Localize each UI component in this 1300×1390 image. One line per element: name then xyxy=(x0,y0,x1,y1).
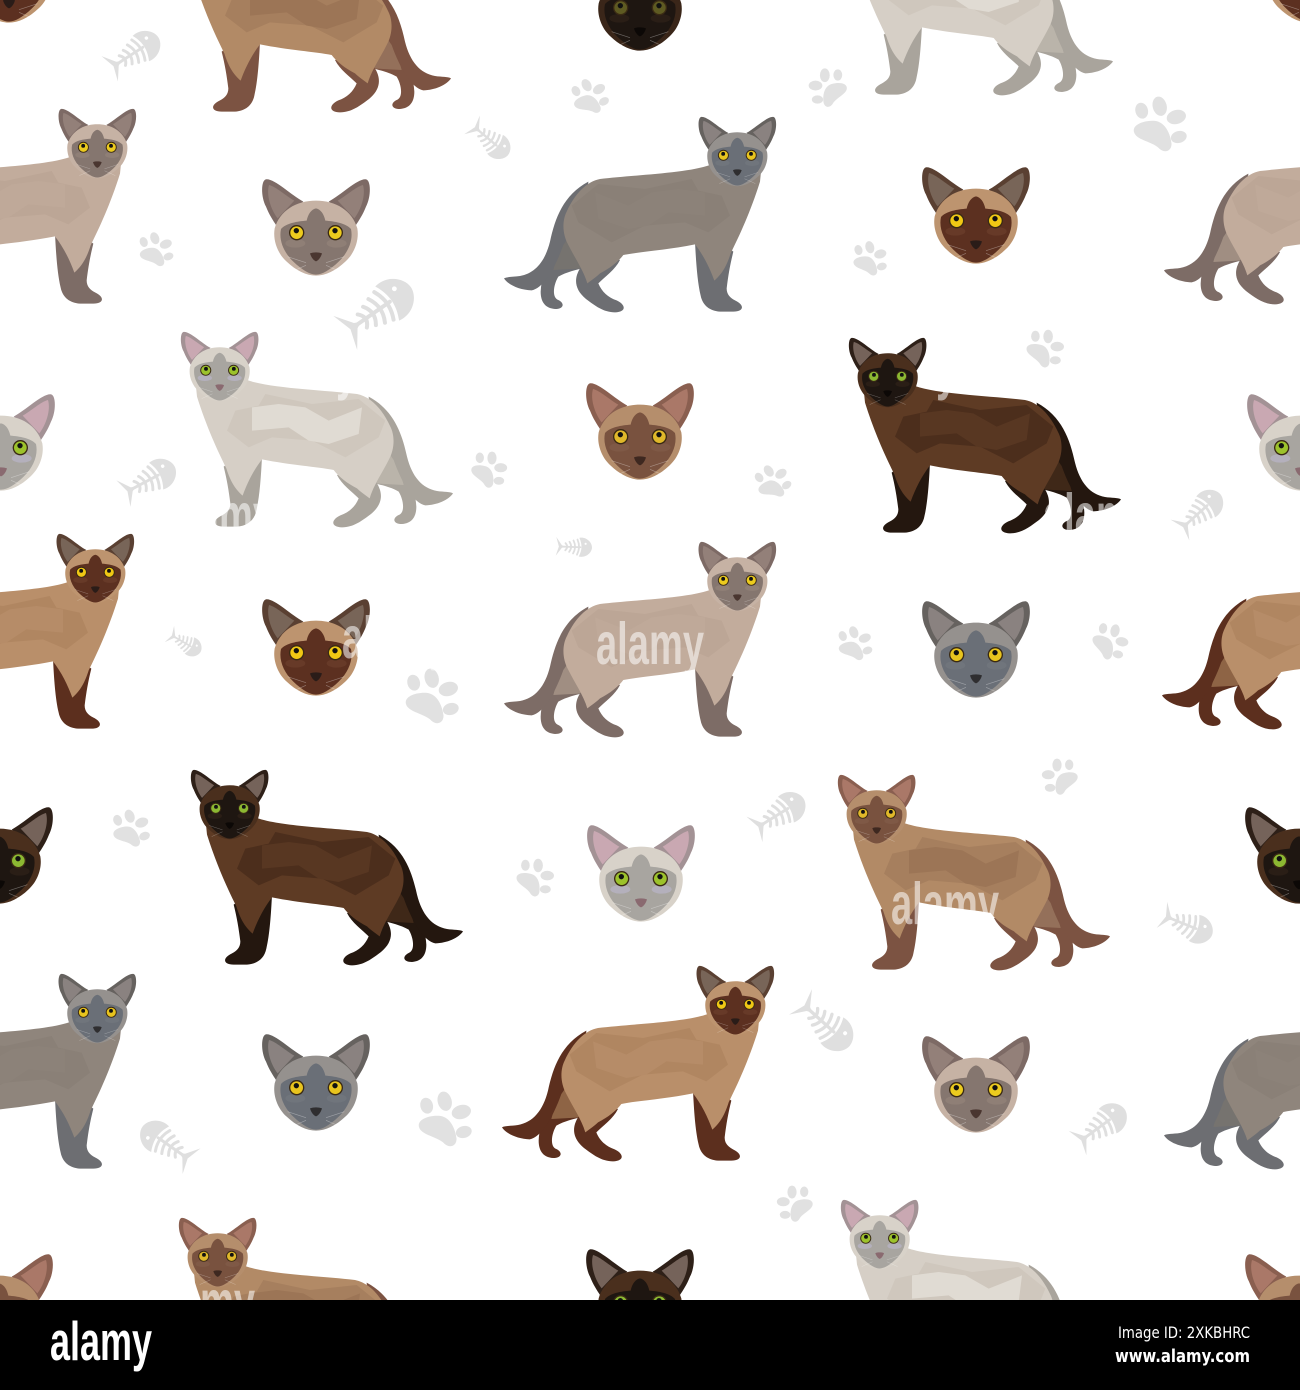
cat: taupe left edge xyxy=(0,109,136,304)
icon: cat head top right xyxy=(1255,0,1300,23)
watermark dark cat feet: alamy xyxy=(1043,482,1151,548)
icon: cat head light right xyxy=(1247,394,1300,491)
watermark light cat: alamy xyxy=(166,482,274,548)
cat: taupe right edge xyxy=(1164,109,1300,304)
icon: paw xyxy=(565,72,615,121)
icon: cat head bottom right xyxy=(1245,1254,1300,1351)
cat: light top right xyxy=(841,0,1113,95)
icon: cat head beige xyxy=(262,179,370,276)
icon: cat head blue xyxy=(922,601,1030,698)
cat: grey upper centre xyxy=(504,117,776,312)
icon: fish bone xyxy=(165,626,205,660)
watermark bottom left: alamy xyxy=(147,1269,255,1335)
icon: fish bone xyxy=(133,1114,201,1174)
cat: grey left edge xyxy=(0,974,136,1169)
icon: cat head bottom centre xyxy=(586,1249,694,1346)
watermark head: alamy xyxy=(342,605,450,671)
cat: cinnamon top xyxy=(179,0,451,112)
watermark centre: alamy xyxy=(596,611,704,677)
cat: grey right edge xyxy=(1164,974,1300,1169)
icon: fish bone xyxy=(746,786,812,842)
icon: cat head dark right xyxy=(1245,807,1300,904)
footer bar xyxy=(0,1300,1300,1390)
icon: paw xyxy=(471,452,507,488)
cat: dark right xyxy=(849,338,1121,533)
icon: paw xyxy=(749,458,797,506)
cat: tan lower centre xyxy=(502,966,774,1161)
icon: paw xyxy=(1027,330,1064,367)
icon: cat head top centre xyxy=(586,0,694,51)
icon: fish bone xyxy=(556,537,592,557)
icon: paw xyxy=(107,804,155,853)
icon: paw xyxy=(399,663,466,730)
icon: paw xyxy=(809,68,847,107)
icon: fish bone xyxy=(464,115,516,165)
cat: beige centre xyxy=(504,542,776,737)
icon: paw xyxy=(777,1186,813,1222)
watermark right: alamy xyxy=(891,871,999,937)
cat: light bottom xyxy=(841,1200,1113,1390)
icon: fish bone xyxy=(1170,483,1230,541)
footer logo: alamy xyxy=(50,1310,152,1372)
icon: paw xyxy=(849,238,891,280)
icon: paw xyxy=(412,1086,479,1153)
cat: light left xyxy=(181,332,453,527)
icon: cat head grey xyxy=(262,1034,370,1131)
pattern: fish bones xyxy=(101,24,1230,1174)
icon: paw xyxy=(1042,759,1078,795)
cat: dark lower left xyxy=(191,770,463,965)
cat: tan right edge xyxy=(1162,534,1300,729)
icon: cat head beige lower xyxy=(922,1036,1030,1133)
icon: paw xyxy=(1089,621,1131,663)
icon: paw xyxy=(517,859,554,896)
cat: cinnamon bottom xyxy=(179,1218,451,1390)
pattern: standing cats facing left xyxy=(179,0,1121,1390)
icon: cat head top left xyxy=(0,0,63,23)
icon: cat head light centre xyxy=(587,825,695,922)
icon: fish bone xyxy=(1157,902,1217,948)
icon: paw xyxy=(833,622,877,666)
icon: paw xyxy=(134,228,178,272)
cat: cinnamon lower right xyxy=(838,775,1110,970)
cat: tan left edge xyxy=(0,534,134,729)
icon: fish bone xyxy=(116,453,182,507)
watermarks xyxy=(147,335,1151,1335)
pattern: paw prints xyxy=(107,68,1194,1222)
watermark dark cat back: y xyxy=(936,335,958,401)
icon: cat head seal xyxy=(922,167,1030,264)
icon: cat head dark left xyxy=(0,807,53,904)
pattern: standing cats facing right xyxy=(0,109,1300,1169)
icon: paw xyxy=(1127,91,1194,158)
image id: Image ID: 2XKBHRC xyxy=(1118,1323,1250,1342)
icon: fish bone xyxy=(1068,1096,1134,1156)
icon: fish bone xyxy=(333,270,423,350)
icon: cat head cinnamon xyxy=(586,383,694,480)
website: www.alamy.com xyxy=(1115,1346,1250,1367)
icon: cat head bottom left xyxy=(0,1254,53,1351)
icon: cat head chocolate xyxy=(262,599,370,696)
icon: fish bone xyxy=(789,989,861,1059)
icon: cat head light left xyxy=(0,394,55,491)
icon: fish bone xyxy=(101,24,167,82)
watermark light cat back: y xyxy=(336,335,358,401)
